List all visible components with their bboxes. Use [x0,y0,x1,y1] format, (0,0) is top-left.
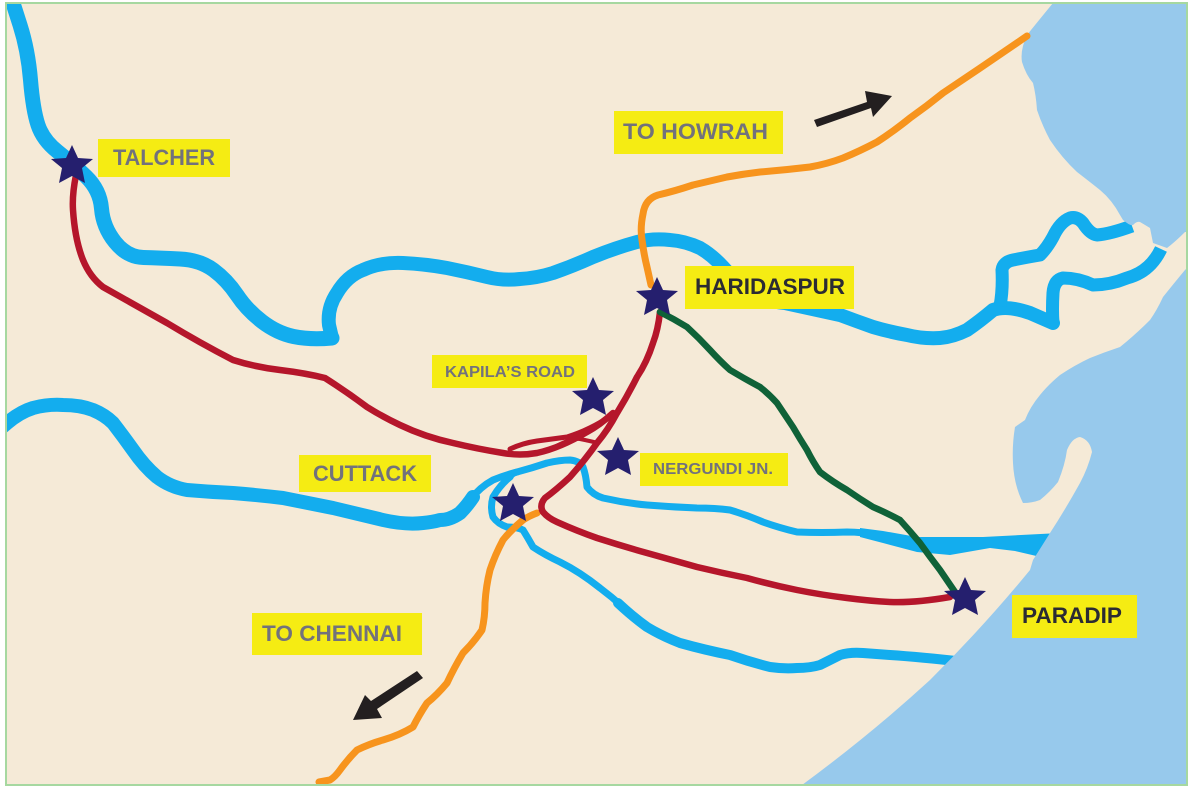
star: Nergundi Jn. [597,437,639,475]
rail: red junction upper loop [510,415,612,449]
label: To Howrah: TO HOWRAH [623,119,768,144]
star: Haridaspur [636,277,678,315]
label: To Howrah [614,111,783,154]
river: central branch [470,460,890,540]
rail: orange to Howrah [641,36,1027,285]
arrow: to Chennai [353,671,423,720]
sea [802,3,1187,785]
label: Cuttack: CUTTACK [313,461,417,486]
label: Talcher [98,139,230,177]
label: Kapila's Road [432,355,587,388]
stations [51,145,986,615]
sea: north-east [1022,3,1187,248]
star: Paradip [944,577,986,615]
rail: red junction lower loop [553,439,598,448]
river: Talcher reach [12,0,332,339]
river: estuary [860,528,1050,556]
rail lines [73,36,1027,782]
label: Paradip [1012,595,1137,638]
arrow: to Howrah [814,91,892,127]
rail: orange to Chennai [319,513,537,782]
river: southern branch [492,472,623,607]
river: northern reach [329,239,1053,338]
sea: south-east [802,268,1187,785]
star: Talcher [51,145,93,183]
label: Haridaspur: HARIDASPUR [695,274,845,299]
river: delta upper branch [1000,218,1132,306]
rail: red Talcher to Kapila [73,175,613,454]
rail: red Haridaspur to Paradip [541,312,950,602]
label: Cuttack [299,455,431,492]
label: Kapila's Road: KAPILA’S ROAD [445,364,575,381]
star: Kapila's Road [572,377,614,415]
river: delta lower branch [1052,249,1161,323]
label: Haridaspur [685,266,854,309]
label: Nergundi Jn. [640,453,788,486]
label: Talcher: TALCHER [113,145,215,170]
star: Cuttack [492,483,534,521]
river: southern lower reach [618,603,965,668]
label: Paradip: PARADIP [1022,603,1122,628]
river: Mahanadi main [0,405,473,524]
label: Nergundi Jn.: NERGUNDI JN. [653,461,773,478]
rail: green Haridaspur to Paradip [660,312,955,592]
label: To Chennai [252,613,422,655]
label: To Chennai: TO CHENNAI [262,621,402,646]
